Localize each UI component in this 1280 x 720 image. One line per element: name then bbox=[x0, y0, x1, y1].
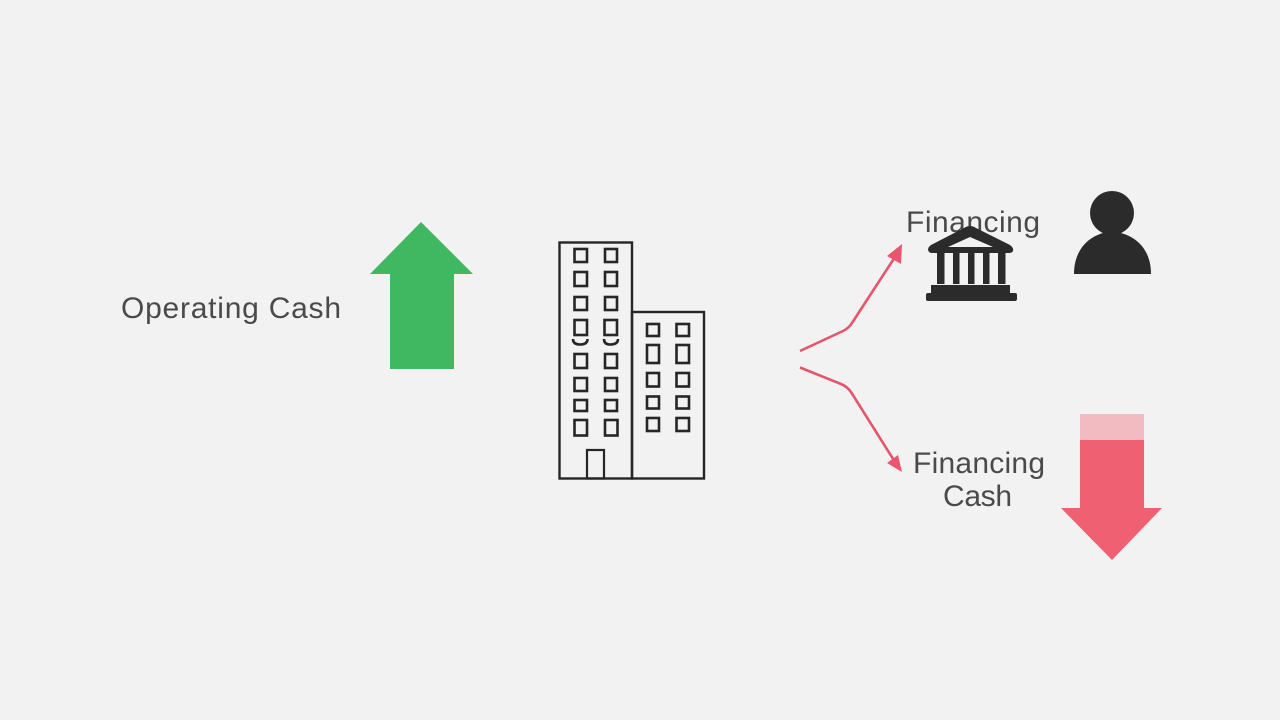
label: Financing Cash: Cash bbox=[943, 480, 1012, 513]
icon: bank bbox=[926, 226, 1017, 301]
label: Financing (top): Financing bbox=[906, 206, 1040, 239]
arrow: up to financing bbox=[800, 244, 902, 351]
label: Financing Cash: Financing bbox=[913, 447, 1045, 480]
label: Financing Cash bbox=[913, 447, 1045, 513]
icon: green up arrow bbox=[370, 222, 473, 369]
bank columns bbox=[937, 252, 944, 284]
tall building outline bbox=[560, 242, 632, 478]
door bbox=[587, 450, 604, 478]
person body bbox=[1074, 233, 1151, 274]
icon: office buildings bbox=[560, 242, 704, 478]
tall building windows bbox=[573, 249, 618, 436]
arrow: down to financing cash bbox=[800, 368, 902, 472]
short building outline bbox=[632, 312, 704, 478]
person head bbox=[1090, 191, 1134, 235]
bank roof bbox=[928, 226, 1013, 253]
icon: person bbox=[1074, 191, 1151, 274]
bank base bbox=[931, 285, 1010, 294]
icon: red down arrow bbox=[1061, 414, 1162, 560]
short building windows bbox=[647, 324, 689, 431]
label: Operating Cash: Operating Cash bbox=[121, 292, 341, 325]
